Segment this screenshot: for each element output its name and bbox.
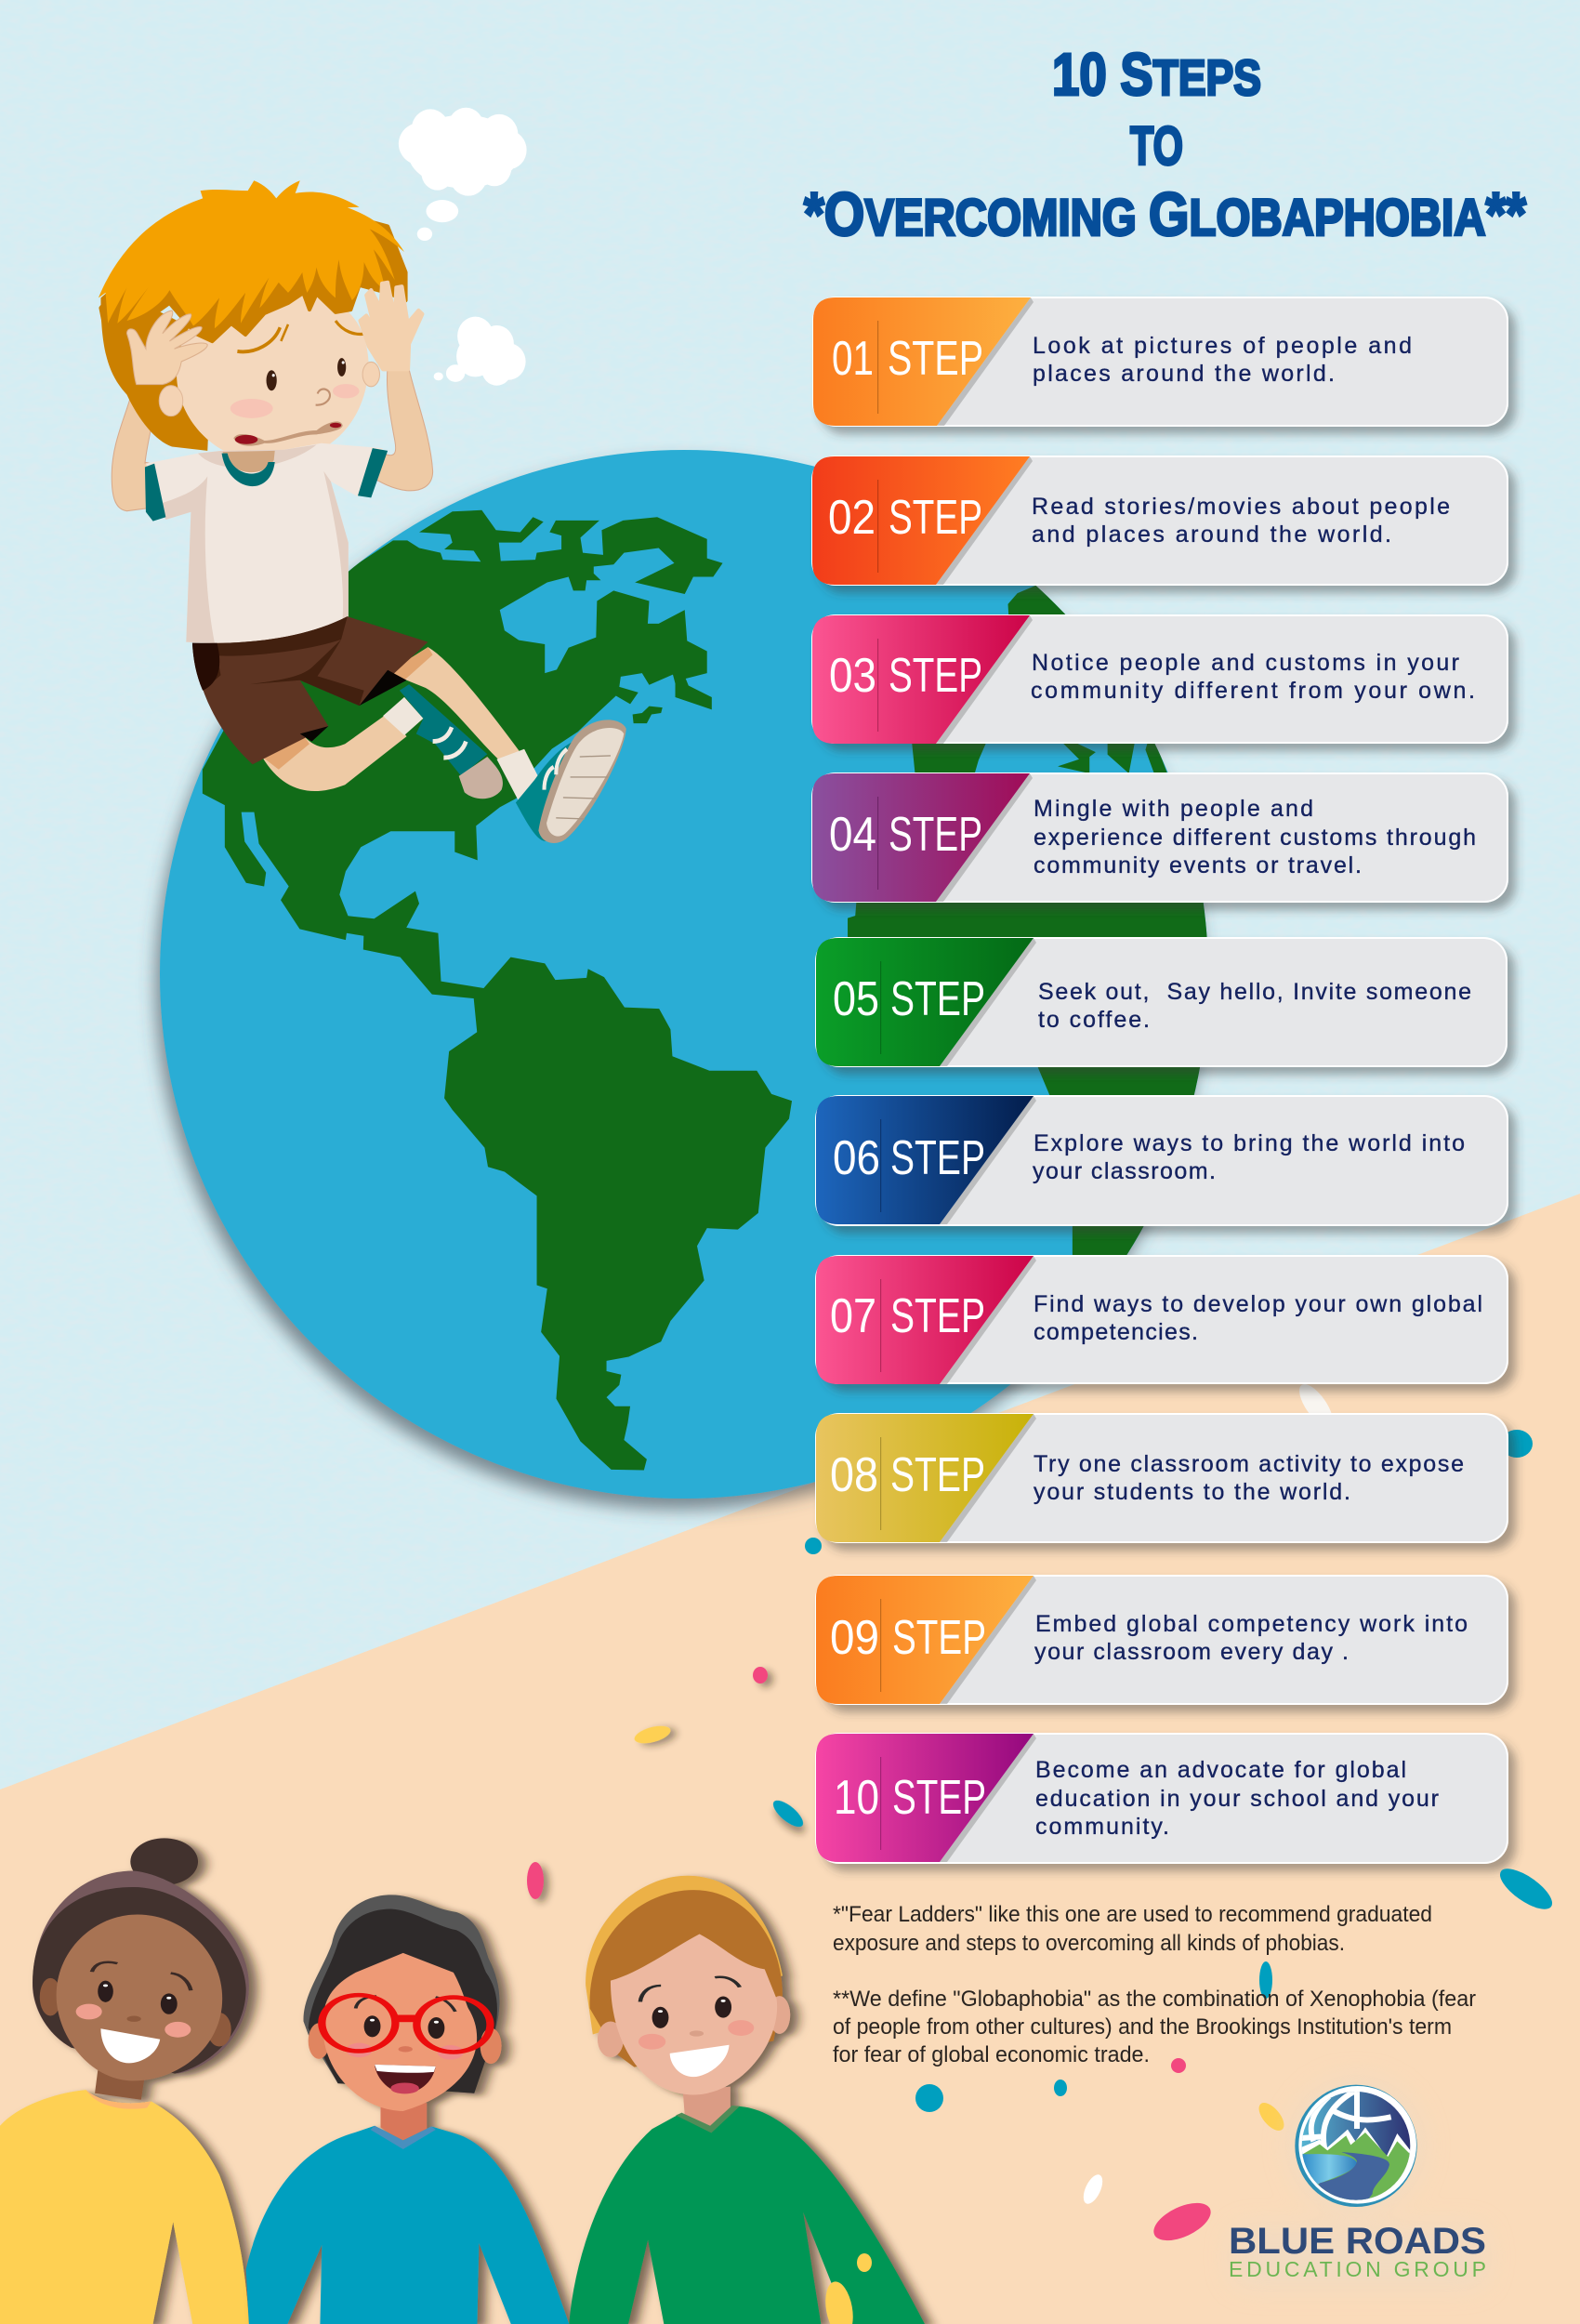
rear shoe [400, 684, 503, 799]
bent leg [262, 713, 407, 791]
confetti scattered on peach area [527, 1667, 1558, 2248]
footnote two: of people from other cultures) and the Brookings Institution's term [833, 2014, 1452, 2040]
boy's face details [230, 321, 366, 446]
step 07 card: Find ways to develop your own global [1034, 1291, 1482, 1317]
collar and sleeve trim [145, 448, 388, 522]
step 06 card: Explore ways to bring the world into [1034, 1130, 1465, 1156]
step 06 card: your classroom. [1033, 1158, 1216, 1184]
step 07 card: competencies. [1034, 1319, 1198, 1345]
step 01 card [813, 297, 1508, 426]
logo wordmark: BLUE ROADS [1229, 2221, 1486, 2262]
step 10 card: 10 [834, 1771, 879, 1825]
sock one [383, 697, 423, 735]
boy's right hand [361, 283, 422, 369]
step 03 card: community different from your own. [1031, 678, 1475, 704]
step 04 card: Mingle with people and [1034, 796, 1313, 822]
globe with continents [160, 450, 1208, 1499]
step cards list [812, 297, 1508, 1863]
title line 3: *OVERCOMING GLOBAPHOBIA** [804, 179, 1526, 248]
thought bubble small dots upper [417, 200, 458, 241]
boy's right arm [371, 366, 433, 491]
step 03 card: STEP [889, 649, 982, 703]
step 03 card: 03 [829, 649, 876, 703]
logo emblem [1295, 2085, 1417, 2207]
step 10 card [816, 1734, 1508, 1863]
step 08 card: your students to the world. [1034, 1479, 1350, 1505]
step 05 card: to coffee. [1038, 1007, 1150, 1033]
background: textured blue diagonal area [0, 0, 1580, 1789]
knee band [262, 733, 309, 770]
logo: Blue Roads Education Group [1229, 2079, 1487, 2287]
step 10 card: STEP [892, 1771, 986, 1825]
step 08 card: Try one classroom activity to expose [1034, 1451, 1464, 1477]
step 01 card: places around the world. [1033, 361, 1335, 387]
footnote two: **We define "Globaphobia" as the combination of Xenophobia (fear [833, 1987, 1476, 2012]
step 05 card: 05 [833, 972, 879, 1026]
step 07 card: STEP [890, 1289, 985, 1343]
ears [159, 362, 379, 416]
dark fringe [100, 201, 406, 344]
Americas landmass [203, 510, 792, 1471]
step 04 card: 04 [829, 808, 876, 862]
title line 2: TO [1130, 116, 1183, 177]
sock two [496, 749, 538, 800]
step 05 card [816, 938, 1507, 1066]
step 02 card: STEP [889, 491, 982, 545]
shorts [192, 616, 428, 764]
step 05 card: STEP [890, 972, 985, 1026]
step 05 card: Seek out, Say hello, Invite someone [1038, 979, 1471, 1005]
step 02 card: 02 [828, 491, 876, 545]
step 09 card: Embed global competency work into [1035, 1611, 1468, 1637]
back hair [100, 287, 212, 451]
step 07 card: 07 [830, 1289, 876, 1343]
step 09 card: STEP [892, 1611, 986, 1665]
head [177, 287, 369, 462]
step 04 card: community events or travel. [1034, 852, 1362, 878]
person two: boy in blue with red glasses [246, 1895, 569, 2324]
step 06 card: 06 [833, 1131, 880, 1185]
step 03 card: Notice people and customs in your [1032, 650, 1459, 676]
footnote two: for fear of global economic trade. [833, 2042, 1150, 2067]
step 04 card: experience different customs through [1034, 825, 1476, 851]
boy character with thought clouds [99, 108, 626, 843]
step 02 card: and places around the world. [1032, 522, 1391, 548]
step 06 card: STEP [890, 1131, 985, 1185]
step 01 card: 01 [832, 332, 874, 386]
boy's left hand [127, 310, 207, 385]
step 09 card: 09 [830, 1611, 879, 1665]
neck [223, 451, 275, 472]
boy's left arm [112, 382, 163, 511]
yellow confetti near the green sweater [822, 2253, 872, 2324]
person three: boy in green [569, 1876, 925, 2324]
footnote two [833, 1987, 1476, 2067]
step 03 card [812, 615, 1508, 744]
footnotes [833, 1902, 1476, 2067]
step 07 card [816, 1256, 1508, 1384]
extended leg band [388, 647, 433, 680]
logo tagline: EDUCATION GROUP [1229, 2257, 1486, 2281]
shirt [146, 443, 383, 643]
orange hair top [99, 180, 404, 328]
step 08 card: 08 [830, 1448, 878, 1502]
footnote one: *"Fear Ladders" like this one are used to recommend graduated [833, 1902, 1432, 1927]
thought cloud large [399, 108, 527, 196]
step 04 card [812, 773, 1508, 902]
step 10 card: education in your school and your [1035, 1786, 1439, 1812]
step 08 card [816, 1414, 1508, 1542]
shirt shading [158, 444, 349, 643]
title line 1: 10 STEPS [1052, 41, 1261, 108]
Africa and Europe behind the step cards [848, 585, 1208, 1296]
extended leg [388, 647, 534, 772]
step 06 card [816, 1096, 1508, 1225]
step 02 card: Read stories/movies about people [1032, 494, 1450, 520]
step 01 card: STEP [888, 332, 983, 386]
footnote one: exposure and steps to overcoming all kinds of phobias. [833, 1931, 1345, 1956]
step 10 card: Become an advocate for global [1035, 1757, 1406, 1783]
step 10 card: community. [1035, 1814, 1169, 1840]
title [804, 41, 1526, 248]
footnote one [833, 1902, 1432, 1956]
people group [0, 1838, 925, 2324]
step 01 card: Look at pictures of people and [1033, 333, 1412, 359]
confetti behind cards [805, 1380, 1533, 1554]
thought cloud second [434, 317, 526, 386]
logo halo [1231, 2079, 1487, 2287]
step 09 card [816, 1576, 1508, 1704]
step 04 card: STEP [889, 808, 982, 862]
front shoe [516, 720, 626, 843]
person one: girl in yellow [0, 1838, 249, 2324]
step 09 card: your classroom every day . [1034, 1639, 1349, 1665]
step 08 card: STEP [890, 1448, 985, 1502]
step 02 card [812, 456, 1508, 585]
